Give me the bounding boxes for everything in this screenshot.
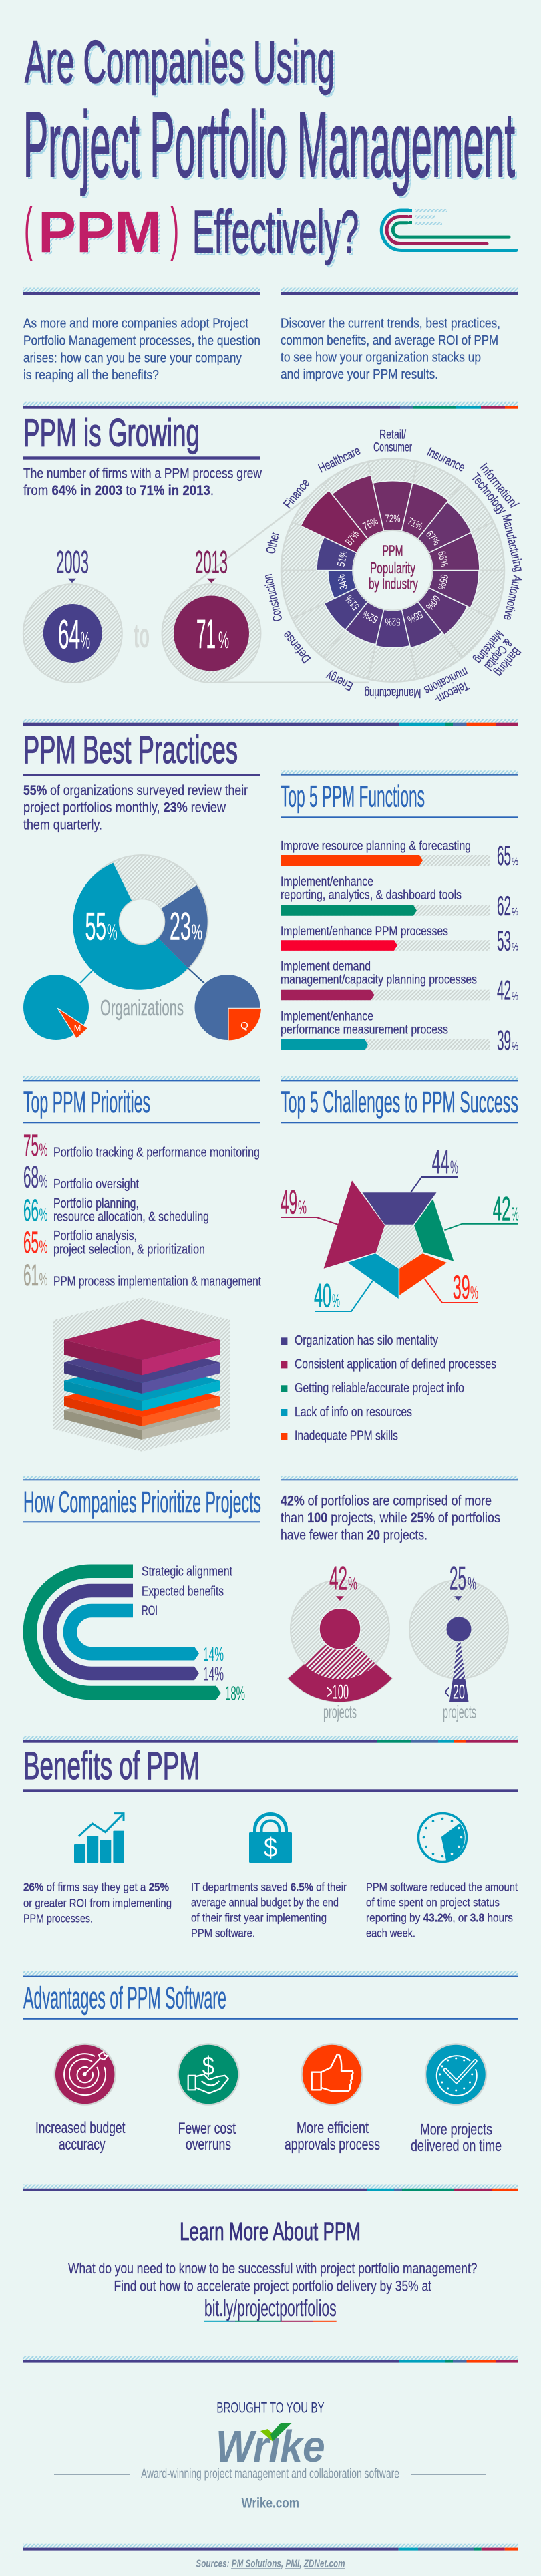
chart: challenges pentagon: 49 [281,1183,297,1221]
priorities list [23,1128,261,1292]
intro text right: to see how your organization stacks up [281,350,481,365]
chart: challenges pentagon: 40 [314,1277,331,1315]
heading: PPM Best Practices: PPM Best Practices [23,728,238,772]
chart: 25% under 20 projects [409,1559,508,1722]
advantage: approvals [285,2044,380,2154]
connector lines from 2013 to wheel [189,483,369,683]
benefit text 2: IT departments saved 6.5% of their [191,1881,347,1894]
growth text: from 64% in 2003 to 71% in 2013. [23,483,214,498]
chart: review frequency donut: % [107,920,118,945]
chart: challenges pentagon: % [332,1291,340,1311]
heading: Advantages of PPM Software: Advantages of PPM Software [23,1981,226,2016]
chart: PPM popularity by industry wheel: Popularity [370,559,415,577]
chart: prioritization curved bars: Expected benefits [142,1584,224,1599]
chart: PPM popularity by industry wheel: 67% [423,529,442,548]
advantage: on-time delivery [411,2044,502,2155]
chart: PPM popularity by industry wheel: & Capital [481,636,515,673]
benefit text 2: PPM software. [191,1927,255,1940]
advantage: approvals: More efficient [297,2119,369,2137]
best practices text [23,783,248,832]
chart: 25% under 20 projects: projects [443,1702,476,1722]
chart: PPM popularity by industry wheel: Finance [281,476,313,511]
priorities list: Portfolio planning, [53,1196,139,1211]
benefit text 1: PPM processes. [23,1911,93,1925]
legend: challenges: Lack of info on resources [295,1405,412,1420]
chart: PPM popularity by industry wheel: 55% [405,608,424,625]
advantage: cost overruns: overruns [186,2136,231,2154]
bar: function 5: Implement/enhance [281,1009,373,1023]
bar: function 2: 62 [497,890,511,921]
chart: review frequency donut: 55 [85,905,106,949]
chart: PPM popularity by industry wheel: 87% [343,529,362,548]
bar: function 4: Implement demand [281,960,371,974]
portfolio size text: have fewer than 20 projects. [281,1528,427,1543]
benefit text 3: of time spent on project status [366,1896,500,1909]
priorities list: PPM process implementation & management [53,1275,261,1289]
chart: PPM popularity by industry wheel: 52% [385,616,401,627]
chart: PPM popularity by industry wheel: Telecom- [432,678,471,707]
benefit text 3 [366,1881,518,1940]
intro text left [23,316,260,383]
priorities list: project selection, & prioritization [53,1242,205,1257]
pie: monthly [23,968,95,1040]
bar: function 4: management/capacity planning processes [281,973,477,987]
chart: PPM popularity by industry wheel: 65% [435,573,449,591]
benefit text 3: each week. [366,1927,415,1940]
best practices text: them quarterly. [23,817,102,832]
heading: Top PPM Priorities: Top PPM Priorities [23,1085,150,1119]
chart: PPM popularity by industry wheel: 66% [435,550,449,568]
intro text left: As more and more companies adopt Project [23,316,248,331]
benefit text 1: or greater ROI from implementing [23,1896,172,1909]
chart: PPM popularity by industry wheel: by Industry [369,575,418,593]
chart: PPM popularity by industry wheel: Banking [492,644,523,679]
intro text left: is reaping all the benefits? [23,367,159,383]
icon: clock [418,1813,466,1861]
chart: PPM popularity by industry wheel: Healthcare [317,444,363,476]
title: Effectively? [194,201,361,268]
growth text: The number of firms with a PPM process grew [23,466,262,482]
bar: function 2: reporting, analytics, & dashboard tools [281,889,462,903]
bar: function 5: performance measurement process [281,1023,448,1037]
chart: PPM popularity by industry wheel: Retail/ [379,428,407,442]
priorities list: Portfolio tracking & performance monitoring [53,1146,260,1160]
chart: 25% under 20 projects: 20 [453,1681,465,1703]
icon: rising chart [74,1814,124,1863]
sources: Sources: PM Solutions, PMI, ZDNet.com [196,2558,345,2569]
intro text right: and improve your PPM results. [281,367,438,382]
bar: function 4 [281,960,518,1006]
advantage: on-time delivery: More projects [420,2121,492,2139]
bar: function 2: % [512,907,518,918]
chart: 25% under 20 projects: 25 [449,1559,466,1597]
label: Organizations: Organizations [100,995,184,1020]
advantage: cost overruns [178,2044,239,2154]
chart: 42% over 100 projects: projects [323,1702,357,1722]
benefit text 2 [191,1881,347,1940]
chart: 2003 circle: 64 [58,612,80,657]
chart: challenges pentagon: 39 [453,1269,470,1306]
benefit text 3: reporting by 43.2%, or 3.8 hours [366,1911,513,1924]
chart: 2013 circle [162,544,260,683]
priorities list: 61 [23,1258,39,1292]
best practices text: project portfolios monthly, 23% review [23,800,226,816]
chart: 2003 circle: % [80,628,90,654]
heading: How Companies Prioritize Projects: How Companies Prioritize Projects [23,1485,261,1519]
chart: prioritization curved bars: Strategic alignment [142,1564,232,1579]
priorities list: 65 [23,1225,39,1259]
chart: PPM popularity by industry wheel: 51% [343,593,362,612]
portfolio size text: than 100 projects, while 25% of portfolios [281,1510,500,1526]
legend: challenges: Inadequate PPM skills [295,1429,398,1444]
icon: padlock with dollar: $ [264,1833,277,1863]
bar: function 3: Implement/enhance PPM processes [281,925,448,939]
title: ) [170,195,179,261]
chart: stacked layers [53,1297,230,1452]
chart: challenges pentagon: % [470,1282,478,1303]
chart: 42% over 100 projects: 42 [329,1559,347,1597]
chart: prioritization curved bars: 18% [225,1683,245,1704]
growth text [23,466,262,498]
legend: challenges [281,1333,496,1444]
chart: PPM popularity by industry wheel: Construction [261,573,285,623]
chart: PPM popularity by industry wheel: 76% [361,516,380,532]
chart: PPM popularity by industry wheel: PPM [382,542,403,560]
chart: 25% under 20 projects: < [445,1681,449,1703]
bar: function 1: % [512,856,518,868]
advantage: on-time delivery: delivered on time [411,2137,502,2155]
chart: PPM popularity by industry wheel: Marketing [471,627,506,666]
pie: quarterly: Q [240,1020,248,1031]
chart: challenges pentagon: % [298,1196,307,1217]
advantage: approvals: approvals process [285,2136,380,2154]
chart: PPM popularity by industry wheel: 34% [336,573,350,591]
bar: function 3 [281,925,518,957]
text: to [134,617,150,655]
heading: Learn More About PPM: Learn More About PPM [180,2218,361,2246]
tagline: Award-winning project management and collaboration software [141,2466,399,2481]
chart: PPM popularity by industry wheel: Manufacturing [499,513,526,573]
priorities list: 68 [23,1160,39,1194]
title: PPM [38,200,162,265]
benefit text 1 [23,1881,172,1925]
advantage: cost overruns: $ [202,2052,214,2081]
benefit text 2: of their first year implementing [191,1911,327,1924]
intro text left: arises: how can you be sure your company [23,351,242,366]
chart: PPM popularity by industry wheel: Manufacturing [365,686,421,700]
bar: function 1: Improve resource planning & forecasting [281,840,471,854]
learn more text: Find out how to accelerate project portfolio delivery by 35% at [114,2277,431,2294]
chart: review frequency donut [73,855,208,990]
priorities list: resource allocation, & scheduling [53,1209,209,1224]
chart: challenges pentagon: 42 [493,1190,511,1227]
benefit text 1: 26% of firms say they get a 25% [23,1881,169,1894]
chart: prioritization curved bars: ROI [142,1603,158,1618]
bar: function 3: % [512,942,518,953]
chart: PPM popularity by industry wheel: Insurance [425,445,467,475]
chart: 42% over 100 projects: % [348,1573,357,1593]
logo mark: nested tracks [381,209,516,250]
chart: PPM popularity by industry wheel: Other [264,530,283,555]
priorities list: Portfolio oversight [53,1177,139,1192]
advantage: cost overruns: Fewer cost [178,2120,236,2138]
legend: challenges: Organization has silo mentality [295,1333,438,1348]
title: Effectively? [192,199,359,266]
chart: challenges pentagon [281,1144,519,1315]
bar: function 2 [281,875,518,921]
intro text left: Portfolio Management processes, the question [23,333,260,349]
best practices text: 55% of organizations surveyed review their [23,783,248,798]
priorities list: % [39,1140,48,1160]
advantage: budget accuracy [35,2044,126,2154]
intro text right: Discover the current trends, best practices, [281,316,500,331]
text: % [512,1203,519,1224]
chart: PPM popularity by industry wheel: 60% [423,593,442,612]
priorities list: % [39,1269,48,1289]
benefit text 2: average annual budget by the end [191,1896,339,1909]
chart: review frequency donut: 23 [170,905,191,949]
chart: 2003 circle [23,544,122,683]
chart: PPM popularity by industry wheel: 52% [361,608,380,625]
pie: quarterly [188,968,262,1041]
chart: PPM popularity by industry wheel [261,428,526,707]
priorities list: 66 [23,1193,39,1227]
label: brought to you by: BROUGHT TO YOU BY [216,2399,325,2416]
portfolio size text: 42% of portfolios are comprised of more [281,1493,492,1508]
bar: function 2: Implement/enhance [281,875,373,889]
icon: padlock with dollar [249,1814,292,1863]
priorities list: 75 [23,1128,39,1162]
chart: PPM popularity by industry wheel: 72% [385,514,401,525]
chart: 2013 circle: 2013 [195,544,228,580]
logo: Wrike: Wrike [216,2422,325,2472]
chart: 42% over 100 projects [287,1559,393,1722]
legend: challenges: Getting reliable/accurate project info [295,1381,464,1396]
title: ( [24,195,33,261]
chart: PPM popularity by industry wheel: 71% [405,516,424,532]
chart: PPM popularity by industry wheel: munications [422,664,470,697]
bar: function 5: 39 [497,1024,511,1056]
chart: prioritization curved bars [30,1564,245,1704]
bar: function 4: 42 [497,975,511,1006]
chart: 2013 circle: 71 [196,611,216,657]
chart: PPM popularity by industry wheel: Information/ [476,461,521,512]
bar: function 1: 65 [497,840,511,871]
chart: 42% over 100 projects: >100 [327,1681,349,1703]
link with coloured underline: bit.ly/projectportfolios [204,2295,337,2321]
chart: PPM popularity by industry wheel: 51% [336,550,350,568]
advantage: budget accuracy: Increased budget [35,2119,126,2137]
priorities list: % [39,1204,48,1225]
chart: PPM popularity by industry wheel: Consumer [373,441,412,455]
priorities list: % [39,1171,48,1191]
bar: function 5 [281,1009,518,1056]
bar: function 5: % [512,1041,518,1052]
chart: prioritization curved bars: 14% [203,1644,224,1665]
chart: prioritization curved bars: 14% [203,1664,224,1685]
chart: PPM popularity by industry wheel: Technology [468,471,509,517]
chart: 2003 circle: 2003 [56,544,89,580]
chart: PPM popularity by industry wheel: Energy [324,668,355,693]
intro text right: common benefits, and average ROI of PPM [281,333,498,348]
heading: Benefits of PPM: Benefits of PPM [23,1744,200,1788]
chart: review frequency donut: % [192,920,202,945]
pie: monthly: M [74,1023,81,1033]
site name: Wrike.com [242,2496,299,2511]
chart: PPM popularity by industry wheel: Automotive [500,574,524,621]
bar: function 4: % [512,991,518,1003]
title [23,28,517,268]
priorities list: % [39,1237,48,1257]
chart: challenges pentagon: % [450,1157,458,1178]
chart: 25% under 20 projects: % [468,1573,476,1593]
heading: PPM is Growing: PPM is Growing [23,412,200,455]
chart: challenges pentagon: 44 [432,1144,449,1181]
advantage: budget accuracy: accuracy [59,2136,106,2154]
chart: 2013 circle: % [218,627,229,653]
bar: function 3: 53 [497,925,511,957]
intro text right [281,316,500,382]
learn more text [68,2260,477,2294]
title: PPM [40,202,164,267]
portfolio size text [281,1493,500,1543]
chart: PPM popularity by industry wheel: Defense [280,628,314,665]
priorities list: Portfolio analysis, [53,1229,137,1243]
bar: function 1 [281,840,518,871]
